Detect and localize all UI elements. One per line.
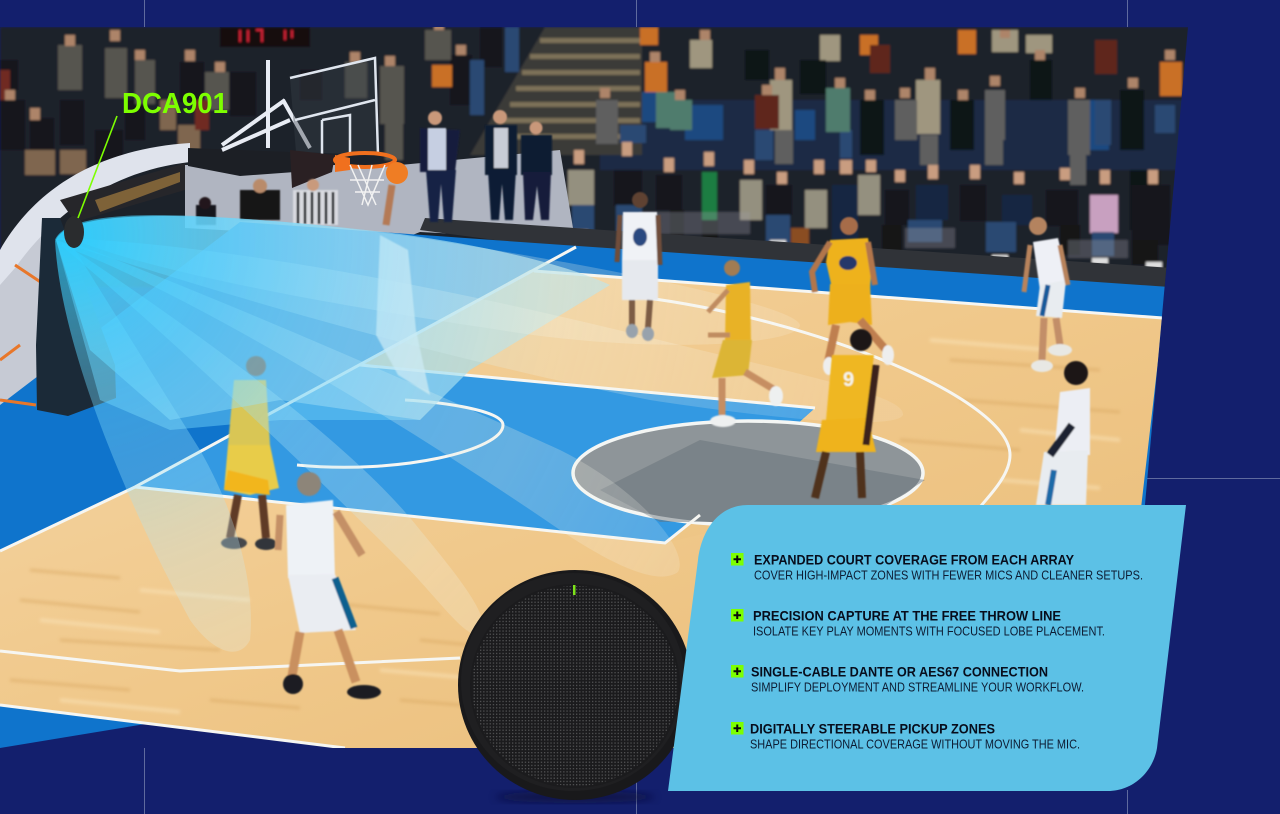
feature 4	[731, 720, 1080, 752]
feature 4: DIGITALLY STEERABLE PICKUP ZONES	[750, 720, 995, 736]
white player 2	[617, 192, 660, 341]
beam underlay wash	[56, 216, 610, 430]
baseline floor left of stanchion	[0, 236, 42, 405]
white player bottom right	[1036, 361, 1090, 505]
left support structure	[0, 143, 295, 416]
feature 3: SIMPLIFY DEPLOYMENT AND STREAMLINE YOUR WORKFLOW.	[751, 680, 1084, 694]
court lines	[0, 247, 1163, 748]
callout line	[78, 116, 117, 218]
standing fans	[0, 20, 1182, 230]
yellow player 34	[812, 217, 894, 375]
center circle	[573, 421, 923, 525]
feature 1	[731, 552, 1143, 582]
feature 2: ISOLATE KEY PLAY MOMENTS WITH FOCUSED LOBE PLACEMENT.	[753, 624, 1105, 638]
yellow player 9: 9	[843, 369, 854, 391]
seated front row	[568, 142, 1170, 268]
foreground white player	[278, 472, 381, 699]
feature 3	[731, 664, 1084, 694]
feature 3: SINGLE-CABLE DANTE OR AES67 CONNECTION	[751, 664, 1048, 680]
sound beam lobes	[55, 215, 903, 652]
stairs	[470, 27, 642, 155]
basket and backboard	[222, 58, 408, 205]
white player right	[1024, 217, 1072, 372]
product label: DCA901	[122, 88, 228, 120]
plank streaks	[10, 340, 1120, 712]
icon: DCA901 ceiling array mic	[458, 570, 692, 803]
yellow player 3 back	[708, 260, 783, 427]
team bench floor	[420, 218, 1172, 290]
feature 2	[731, 608, 1105, 638]
shot clock	[220, 27, 310, 47]
crowd stands	[0, 20, 1190, 287]
panel: features	[668, 505, 1186, 791]
mic mount on backboard	[64, 216, 84, 248]
washed players under beam	[221, 185, 430, 550]
yellow player 9	[815, 329, 876, 498]
upper wood	[360, 270, 1163, 560]
feature 2: PRECISION CAPTURE AT THE FREE THROW LINE	[753, 608, 1061, 624]
feature 4: SHAPE DIRECTIONAL COVERAGE WITHOUT MOVING THE MIC.	[750, 738, 1080, 752]
feature 1: COVER HIGH-IMPACT ZONES WITH FEWER MICS AND CLEANER SETUPS.	[754, 568, 1143, 582]
arena floor behind baseline	[185, 150, 575, 240]
coaches and staff	[196, 110, 552, 225]
blue apron	[0, 222, 1170, 748]
feature 1: EXPANDED COURT COVERAGE FROM EACH ARRAY	[754, 552, 1075, 568]
lower wood	[0, 487, 720, 748]
key paint	[135, 365, 815, 543]
